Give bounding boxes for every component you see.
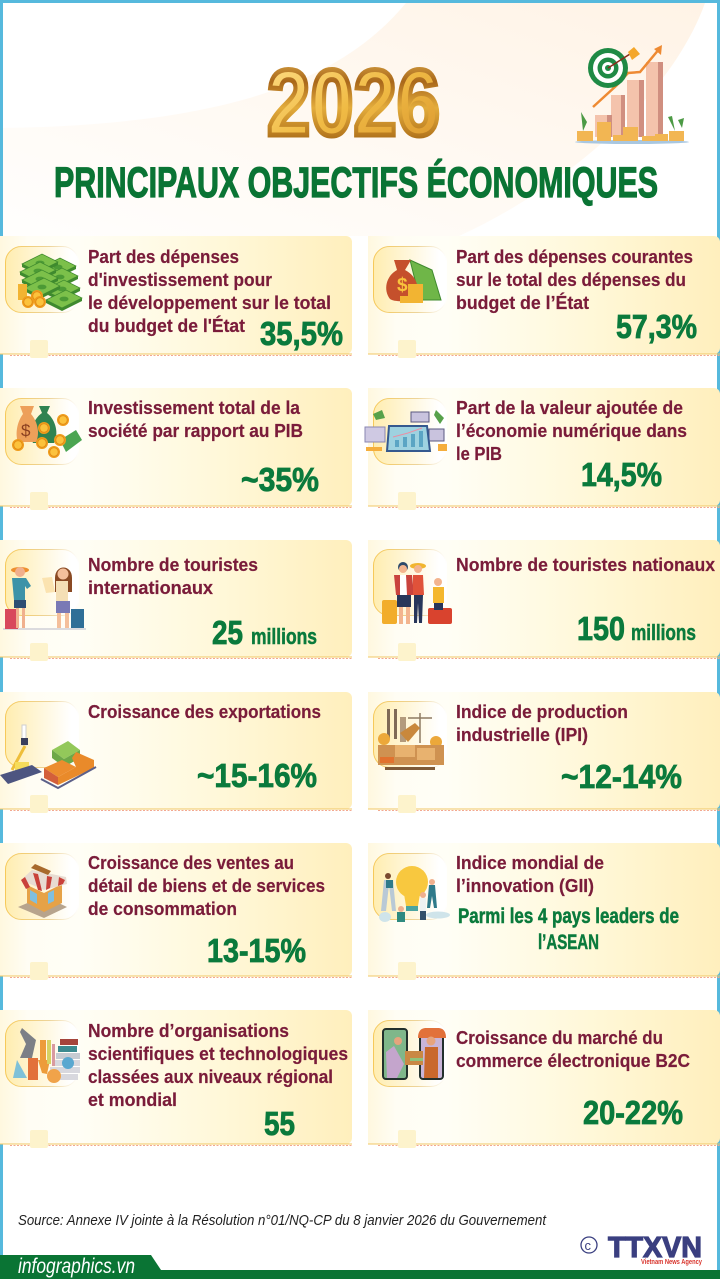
heading: Croissance des ventes au xyxy=(88,853,294,873)
heading: industrielle (IPI) xyxy=(456,725,588,745)
heading: Part de la valeur ajoutée de xyxy=(456,398,683,418)
icon: banknotes and coins xyxy=(6,246,82,312)
panel: exportations xyxy=(0,692,352,813)
icon: microscope, flasks and books xyxy=(6,1020,80,1086)
heading xyxy=(88,398,303,441)
panel: indice de l'innovation xyxy=(368,843,720,980)
value: ~35% xyxy=(241,461,319,498)
heading: Part des dépenses courantes xyxy=(456,247,693,267)
icon: two phones e-commerce xyxy=(374,1020,446,1086)
heading: l’innovation (GII) xyxy=(456,876,594,896)
value: 25 xyxy=(212,614,243,651)
heading xyxy=(456,702,628,745)
icon: money bag and bills xyxy=(374,246,446,312)
heading: classées aux niveaux régional xyxy=(88,1067,333,1087)
value: 20-22% xyxy=(583,1094,683,1131)
heading: détail de biens et de services xyxy=(88,876,325,896)
heading: et mondial xyxy=(88,1090,177,1110)
icon: money bag and bills: $ xyxy=(397,275,408,296)
heading: Nombre de touristes xyxy=(88,555,258,575)
value: 150 xyxy=(577,610,625,647)
heading: Part des dépenses xyxy=(88,247,239,267)
value: 35,5% xyxy=(260,315,343,352)
panel: touristes internationaux xyxy=(0,540,352,661)
heading: internationaux xyxy=(88,578,213,598)
heading xyxy=(88,555,258,598)
heading: Investissement total de la xyxy=(88,398,301,418)
value: 13-15% xyxy=(207,932,306,969)
icon: international tourists xyxy=(3,550,86,629)
icon: digital economy tablet xyxy=(365,398,447,464)
icon: crane and containers xyxy=(0,702,96,788)
icon: money bags and coins xyxy=(6,398,82,464)
copyright logo: TTXVN xyxy=(608,1232,702,1264)
panel: touristes nationaux xyxy=(368,540,720,661)
heading xyxy=(456,1028,690,1071)
panel: investissement total xyxy=(0,388,352,510)
heading: Croissance du marché du xyxy=(456,1028,663,1048)
value xyxy=(458,905,679,954)
value: ~15-16% xyxy=(197,757,317,794)
heading xyxy=(456,853,604,896)
heading: Indice mondial de xyxy=(456,853,604,873)
heading: Indice de production xyxy=(456,702,628,722)
heading: de consommation xyxy=(88,899,237,919)
heading: le développement sur le total xyxy=(88,293,331,313)
heading: l’économie numérique dans xyxy=(456,421,687,441)
icon: innovation light bulb xyxy=(374,854,450,922)
heading: Nombre de touristes nationaux xyxy=(456,555,715,575)
panel: dépenses d'investissement xyxy=(0,236,352,358)
heading: le PIB xyxy=(456,444,502,464)
value: 57,3% xyxy=(616,308,697,345)
heading xyxy=(88,853,325,919)
icon: money bags and coins: $ xyxy=(21,421,31,440)
value: l’ASEAN xyxy=(538,931,599,954)
heading xyxy=(88,247,331,336)
footer band xyxy=(0,1255,720,1279)
icon: target and growth chart xyxy=(575,45,689,144)
icon: store front xyxy=(6,854,78,920)
heading: Nombre d’organisations xyxy=(88,1021,289,1041)
title year 2026: 2026 xyxy=(267,50,440,155)
value: millions xyxy=(631,620,696,645)
panel: organisations scientifiques xyxy=(0,1010,352,1148)
icon: family of national tourists xyxy=(374,550,452,624)
source note: Source: Annexe IV jointe à la Résolution n°01/NQ-CP du 8 janvier 2026 du Gouvernement xyxy=(18,1212,547,1229)
copyright logo: c xyxy=(584,1238,592,1253)
icon: factory xyxy=(374,702,446,770)
heading xyxy=(456,247,693,313)
heading: société par rapport au PIB xyxy=(88,421,303,441)
panel: production industrielle xyxy=(368,692,720,813)
heading: d'investissement pour xyxy=(88,270,272,290)
background swoosh xyxy=(0,3,705,236)
value xyxy=(212,614,317,651)
heading xyxy=(88,1021,348,1110)
footer band: infographics.vn xyxy=(18,1255,135,1278)
heading xyxy=(456,398,687,464)
heading: du budget de l'État xyxy=(88,315,245,336)
heading: commerce électronique B2C xyxy=(456,1051,690,1071)
value: 14,5% xyxy=(581,456,662,493)
panel: dépenses courantes xyxy=(368,236,720,358)
heading: sur le total des dépenses du xyxy=(456,270,686,290)
heading: Croissance des exportations xyxy=(88,702,321,722)
copyright logo: Vietnam News Agency xyxy=(641,1259,702,1266)
panel: commerce électronique xyxy=(368,1010,720,1148)
heading: budget de l’État xyxy=(456,292,589,313)
heading: scientifiques et technologiques xyxy=(88,1044,348,1064)
panel: ventes au détail xyxy=(0,843,352,980)
value: millions xyxy=(251,624,317,649)
value: 55 xyxy=(264,1105,295,1142)
value: ~12-14% xyxy=(561,758,682,795)
value xyxy=(577,610,696,647)
panel: économie numérique xyxy=(365,388,720,510)
